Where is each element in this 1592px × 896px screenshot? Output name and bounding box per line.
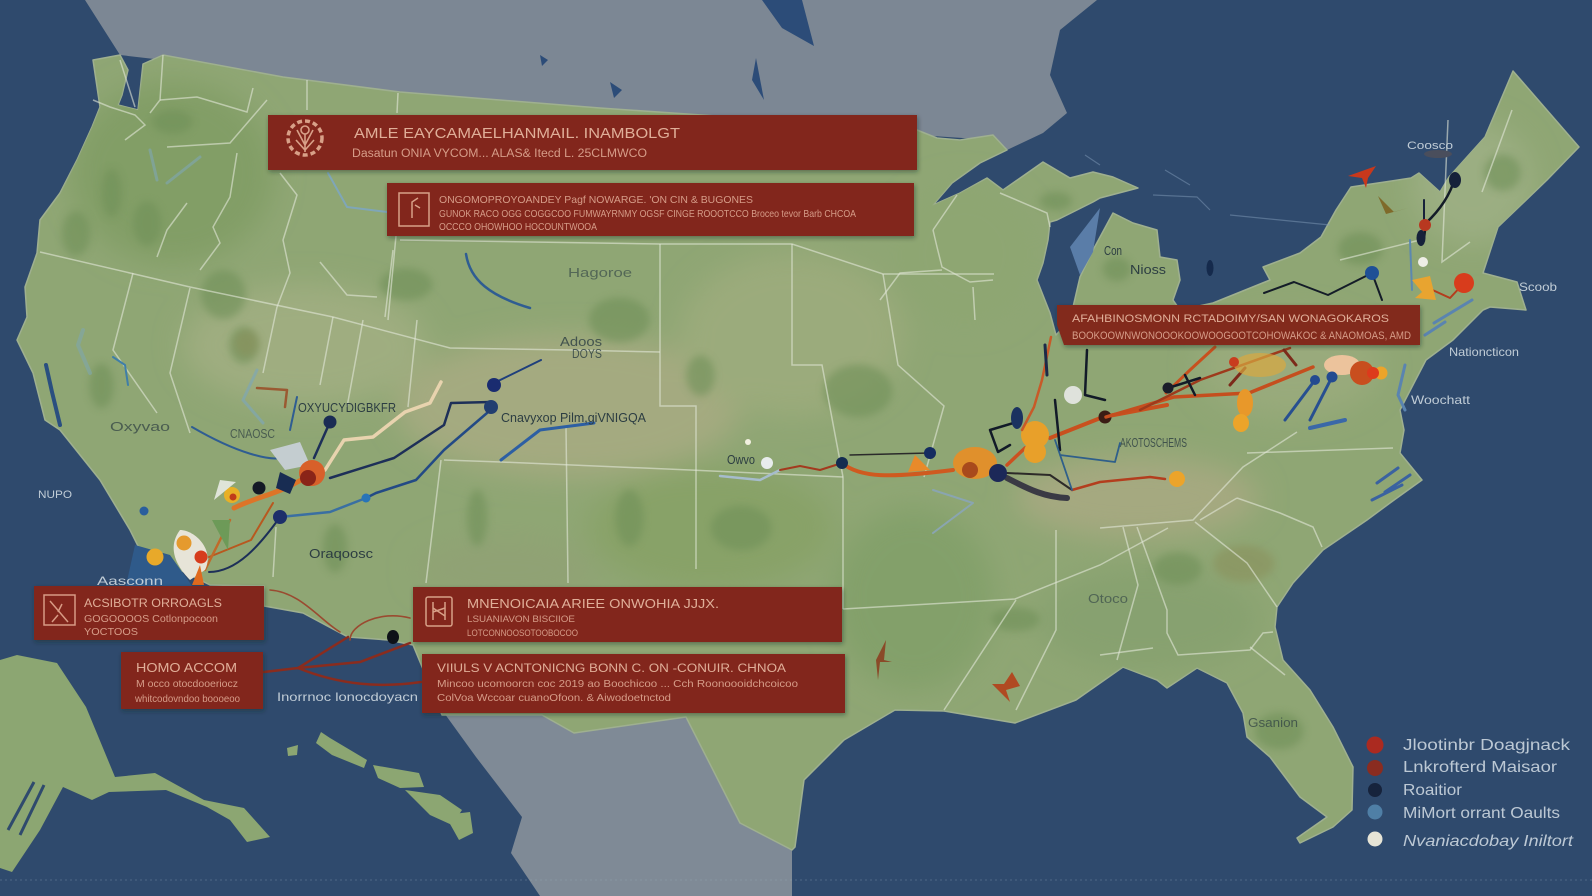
- panel: overview: OCCCO OHOWHOO HOCOUNTWOOA: [439, 221, 597, 233]
- line: northeast red route: [1106, 367, 1313, 417]
- region: Mexico grey: [442, 710, 792, 896]
- label: Hagoroe: Hagoroe: [568, 266, 632, 280]
- icon: red marker, Mississippi: [876, 640, 892, 680]
- state borders: [40, 55, 1512, 710]
- icon: square: [399, 193, 429, 226]
- label: Oraqoosc: Oraqoosc: [309, 547, 373, 561]
- panel: southwest: GOGOOOOS Cotlonpocoon: [84, 613, 218, 625]
- label: Oxyvao: Oxyvao: [110, 420, 170, 434]
- panel: southwest: [34, 586, 264, 640]
- panel: gulf small: M occo otocdooeriocz: [136, 678, 238, 690]
- legend item 3: [1368, 782, 1463, 799]
- region: Canada grey: [85, 0, 1097, 150]
- label: Scoob: Scoob: [1519, 280, 1557, 294]
- icon: red star marker, Gulf coast: [992, 672, 1020, 702]
- routes west: [205, 360, 594, 572]
- legend item 2: Lnkrofterd Maisaor: [1403, 759, 1558, 776]
- label: Nioss: Nioss: [1130, 263, 1166, 277]
- panel: overview: [387, 183, 914, 236]
- icon: red marker: [1348, 166, 1376, 188]
- legend item 5: Nvaniacdobay Iniltort: [1403, 833, 1574, 850]
- label: Owvo: Owvo: [727, 453, 755, 467]
- icon: emblem: [288, 121, 322, 155]
- panel: central lower: ColVoa Wccoar cuanoOfoon. & Aiwodoetnctod: [437, 692, 671, 704]
- panel: central lower: Mincoo ucomoorcn coc 2019 ao Boochicoo ... Cch Roonoooidchcoicoo: [437, 678, 798, 690]
- panel: northeast: [1057, 305, 1420, 345]
- label: Gnoo: Gsanion: [1248, 716, 1298, 730]
- gulf connector lines: [264, 590, 421, 685]
- routes central: [720, 400, 1167, 498]
- lakes in the north: [540, 0, 814, 100]
- panel: gulf small: [121, 652, 263, 709]
- text block: AFAHBINOSMONN RCTADOIMY/SAN WONAGOKAROS: [1072, 313, 1389, 325]
- text block: MNENOICAIA ARIEE ONWOHIA JJJX.: [467, 597, 719, 611]
- label: Akotoschems: AKOTOSCHEMS: [1120, 436, 1187, 450]
- panel: central upper: LSUANIAVON BISCIIOE: [467, 614, 575, 625]
- legend item 1: [1366, 736, 1571, 754]
- label: Nupo: NUPO: [38, 489, 72, 501]
- panel: northeast: BOOKOOWNWONOOOKOOWOOGOOTCOHOWAKOC & ANAOMOAS, AMD: [1072, 330, 1411, 342]
- nodes west: [125, 378, 501, 590]
- map labels: [38, 140, 1557, 730]
- islands chain: [287, 732, 473, 840]
- line: blue route: [366, 413, 487, 498]
- heading: AMLE EAYCAMAELHANMAIL. INAMBOLGT: [354, 125, 680, 142]
- text block: ACSIBOTR ORROAGLS: [84, 598, 222, 610]
- icon: olive marker: [1378, 196, 1408, 214]
- text block: HOMO ACCOM: [136, 660, 237, 675]
- label: Woochatt: Woochatt: [1411, 393, 1471, 407]
- line: dark thick route: [1007, 478, 1067, 498]
- text block: ONGOMOPROYOANDEY Pagf NOWARGE. 'ON CIN & BUGONES: [439, 194, 753, 206]
- panel: central upper: LOTCONNOOSOTOOBOCOO: [467, 628, 578, 639]
- text block: VIIULS V ACNTONICNG BONN C. ON -CONUIR. CHNOA: [437, 663, 786, 675]
- label: Nationcticon: Nationcticon: [1449, 345, 1519, 359]
- line: bright blue route: [501, 423, 594, 460]
- nodes northeast: [876, 150, 1474, 702]
- panel: overview: GUNOK RACO OGG COGGCOO FUMWAYRNMY OGSF CINGE ROOOTCCO Broceo tevor Barb CHCOA: [439, 208, 856, 220]
- line: northern black route: [1264, 273, 1382, 300]
- legend item 1: Jlootinbr Doagjnack: [1403, 737, 1571, 754]
- panel: central upper: [413, 587, 842, 642]
- line: central red route: [780, 463, 842, 470]
- great lakes: [1070, 155, 1330, 276]
- line: orange thick: [234, 473, 312, 508]
- line: cream main route: [325, 382, 441, 470]
- label: Lonocdoyacn: Inorrnoc lonocdoyacn: [277, 690, 418, 704]
- land: southwest peninsula: [0, 655, 270, 872]
- dotted latitude line: [0, 879, 1592, 881]
- rivers and inlets: [46, 150, 1472, 533]
- legend item 4: MiMort orrant Oaults: [1403, 805, 1560, 822]
- panel: gulf small: whitcodovndoo boooeoo: [134, 693, 240, 705]
- terrain shading: [62, 81, 1533, 749]
- subheading: Dasatun ONIA VYCOM... ALAS& Itecd L. 25CLMWCO: [352, 148, 647, 160]
- lake: Michigan light basin: [1070, 208, 1100, 275]
- panel: southwest: YOCTOOS: [84, 626, 138, 638]
- node: gulf dot: [387, 630, 399, 644]
- legend: [1366, 736, 1574, 850]
- label: Cnaosc: CNAOSC: [230, 427, 275, 441]
- panel: central lower: [422, 654, 845, 713]
- label: Otoco: Otoco: [1088, 592, 1128, 606]
- icon: crossed tools: [44, 595, 75, 625]
- legend item 2: [1367, 759, 1558, 776]
- legend item 5: [1368, 832, 1574, 850]
- line: navy route: [330, 402, 491, 478]
- dark strips on peninsula: [8, 782, 44, 835]
- label: Aasconn: Aasconn: [97, 574, 163, 588]
- line: central orange route: [842, 463, 953, 475]
- nodes central: [745, 386, 1185, 487]
- routes northeast: [1022, 178, 1464, 430]
- icon: square figure: [426, 597, 452, 626]
- legend item 3: Roaitior: [1403, 782, 1463, 799]
- label: west label: OXYUCYDIGBKFR: [298, 401, 396, 415]
- label: Adoos Doys: Adoos: [560, 335, 602, 349]
- label: Coosco: Coosco: [1407, 140, 1453, 152]
- map labels: DOYS: [572, 347, 602, 361]
- label: Cnavyxop: Cnavyxop Pilm,giVNIGQA: [501, 411, 647, 425]
- panel: main title: [268, 115, 917, 170]
- lake: small dark lake: [1206, 260, 1214, 276]
- label: Con: Con: [1104, 244, 1122, 258]
